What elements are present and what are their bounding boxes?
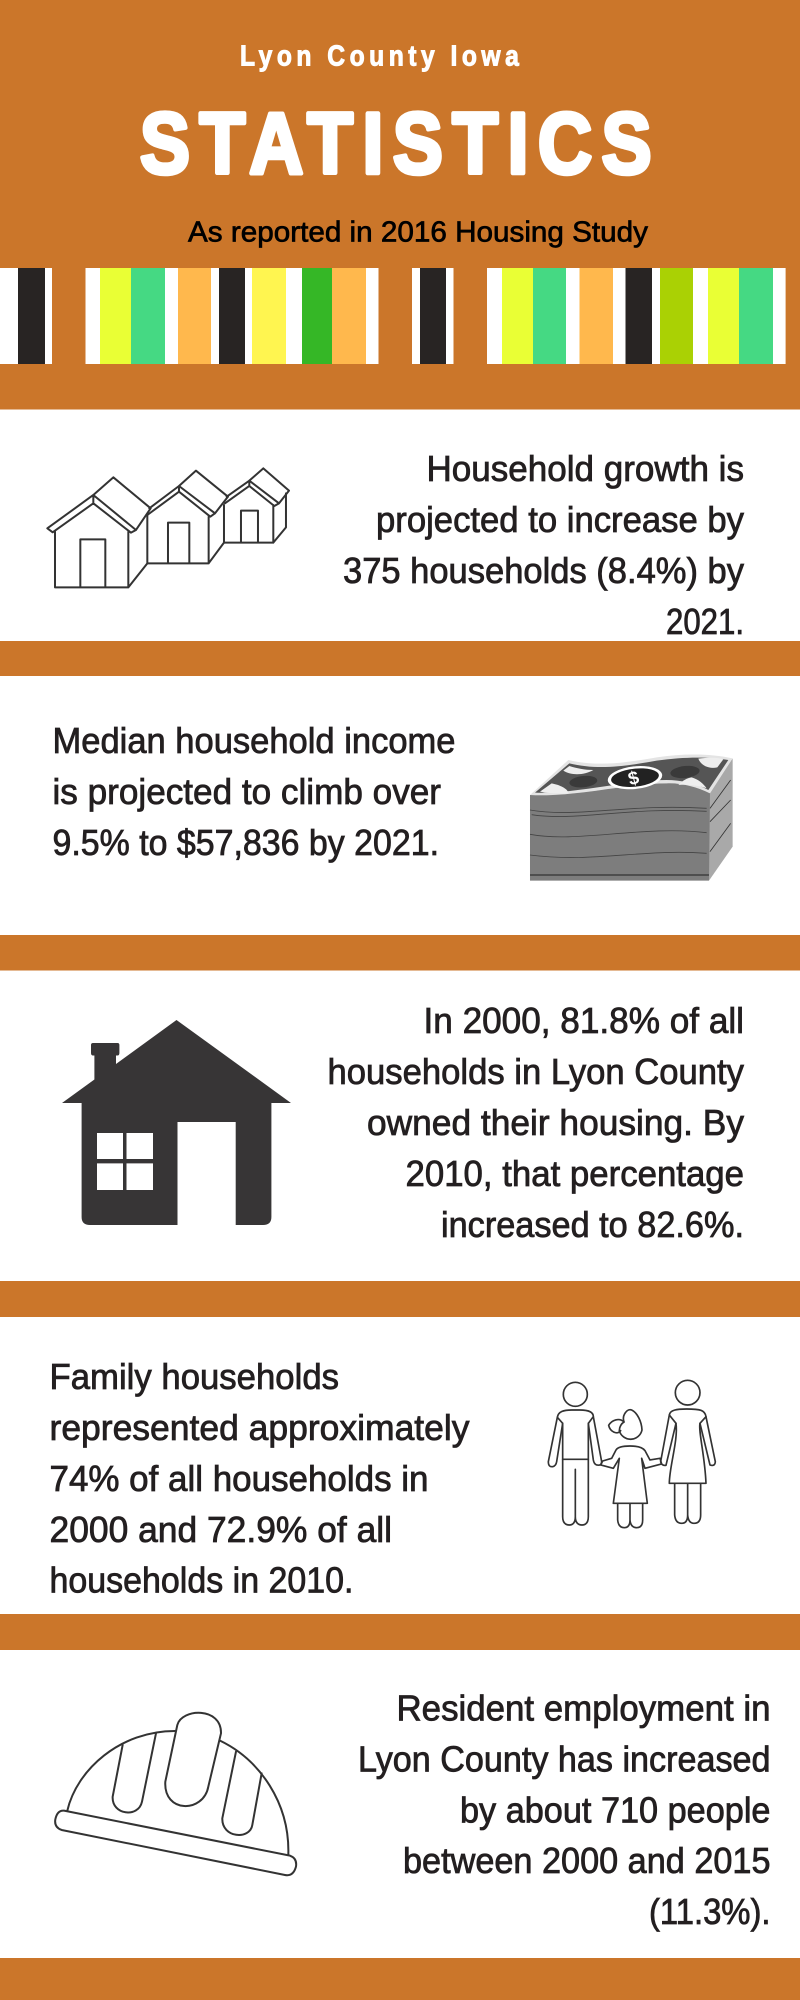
subtitle: Lyon County Iowa: Lyon County Iowa [240,40,520,72]
divider band 4 [0,1614,800,1650]
text: household growth [343,448,744,642]
panel: household growth [47,448,744,642]
divider band 2 [0,935,800,970]
icon: family of three holding hands [548,1380,715,1528]
panel: family households [50,1356,715,1600]
text: family households: 74% of all households in [50,1458,428,1499]
panel: resident employment [55,1688,771,1932]
icon: hard hat [55,1713,296,1875]
text: family households: households in 2010. [50,1560,354,1600]
text: family households: represented approximately [50,1407,470,1448]
icon: dark house silhouette [62,1020,291,1225]
figure: woman [661,1380,715,1523]
divider band 1 [0,641,800,676]
tagline: As reported in 2016 Housing Study: As reported in 2016 Housing Study [188,217,648,249]
icon: stack of money: $ [626,766,642,789]
text: resident employment: between 2000 and 2015 [403,1840,770,1881]
text: resident employment: Resident employment in [396,1688,770,1728]
title: STATISTICS: STATISTICS [140,96,652,192]
panel: home ownership [62,1000,744,1245]
text: home ownership: In 2000, 81.8% of all [424,1000,744,1041]
text: median income: 9.5% to $57,836 by 2021. [52,822,439,863]
text: home ownership: 2010, that percentage [406,1153,744,1194]
text: resident employment: Lyon County has increased [358,1738,770,1780]
text: household growth: 2021. [666,601,744,642]
text: resident employment: by about 710 people [460,1790,770,1830]
text: resident employment: (11.3%). [649,1891,770,1932]
text: median income: Median household income [52,720,456,761]
icon: row of three houses [47,468,289,587]
text: household growth: projected to increase by [376,499,744,540]
text: median income: is projected to climb over [52,771,441,812]
text: home ownership: households in Lyon County [328,1051,744,1092]
icon: stack of money [530,754,733,881]
header panel [0,0,800,410]
text: household growth: Household growth is [426,448,744,489]
figure: man [548,1382,602,1525]
decorative colour stripe band [0,268,786,364]
panel: median household income [52,720,733,881]
text: household growth: 375 households (8.4%) by [343,550,744,591]
figure: girl [601,1410,662,1528]
divider band 3 [0,1281,800,1317]
text: home ownership [328,1000,744,1245]
text: family households: 2000 and 72.9% of all [50,1509,392,1550]
text: median income [52,720,456,863]
text: home ownership: increased to 82.6%. [441,1204,744,1245]
text: resident employment [358,1688,770,1932]
text: family households: Family households [50,1356,339,1397]
text: family households [50,1356,470,1600]
text: home ownership: owned their housing. By [367,1102,744,1143]
footer band [0,1958,800,2000]
